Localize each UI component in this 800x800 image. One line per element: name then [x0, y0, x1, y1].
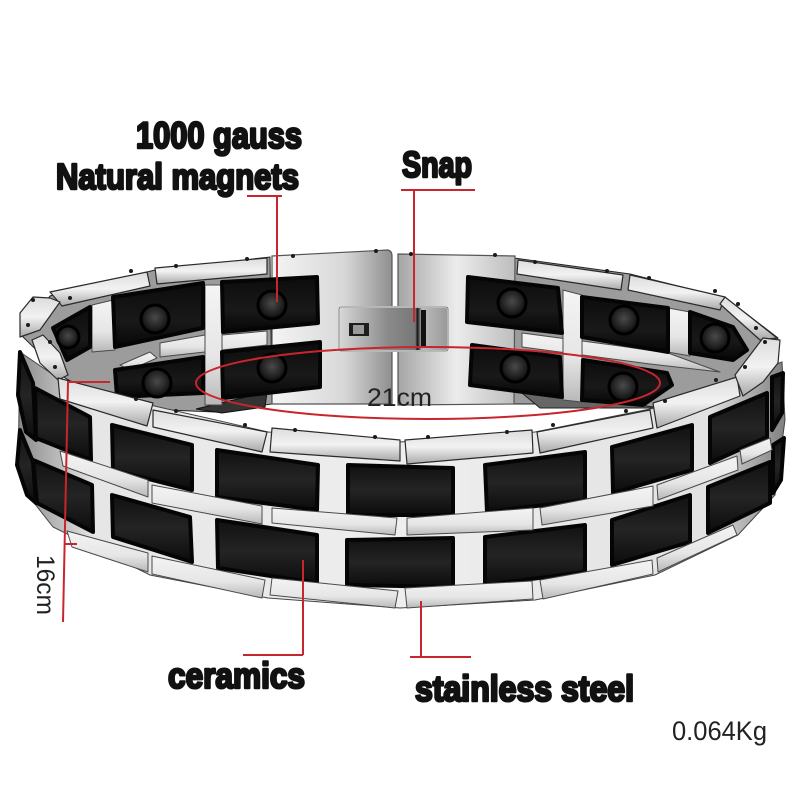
bracelet photo: [17, 249, 785, 608]
back band: magnet screws: [57, 289, 729, 401]
label: stainless steel: stainless steel: [415, 668, 634, 709]
front band: bottom steel links: [67, 525, 737, 608]
back band: upper rim links: [20, 258, 777, 413]
fold-over clasp: [339, 307, 448, 351]
front band: upper steel rim links: [32, 335, 780, 464]
annotation: snap pointer line: [401, 190, 475, 322]
front band: upper ceramic row: [35, 388, 767, 515]
label: 1000 gauss: 1000 gauss: [136, 115, 302, 156]
front band: middle steel links: [60, 438, 772, 535]
annotation: 16cm bracket line: [63, 382, 110, 622]
front band: lower ceramic row: [33, 460, 770, 587]
annotation: 21cm circumference ellipse: [196, 347, 660, 419]
label: weight: 0.064Kg: [672, 716, 767, 746]
label: Natural magnets: Natural magnets: [56, 156, 299, 197]
back band: ceramic inlays: [53, 277, 747, 405]
front band: outer ceramic edges: [17, 352, 784, 503]
label: 16cm: 16cm: [31, 555, 59, 615]
annotation: 1000 gauss pointer line: [247, 196, 282, 302]
label: 21cm: 21cm: [367, 384, 432, 412]
back band: center plates: [272, 250, 515, 405]
label: ceramics: ceramics: [168, 655, 305, 696]
rivet dots: [26, 249, 767, 439]
annotation: ceramics pointer line: [243, 560, 303, 655]
front band: silver base: [18, 352, 785, 608]
annotation: stainless steel pointer line: [410, 601, 471, 657]
label: Snap: Snap: [402, 144, 472, 185]
back band: silver inner structure: [22, 257, 778, 412]
